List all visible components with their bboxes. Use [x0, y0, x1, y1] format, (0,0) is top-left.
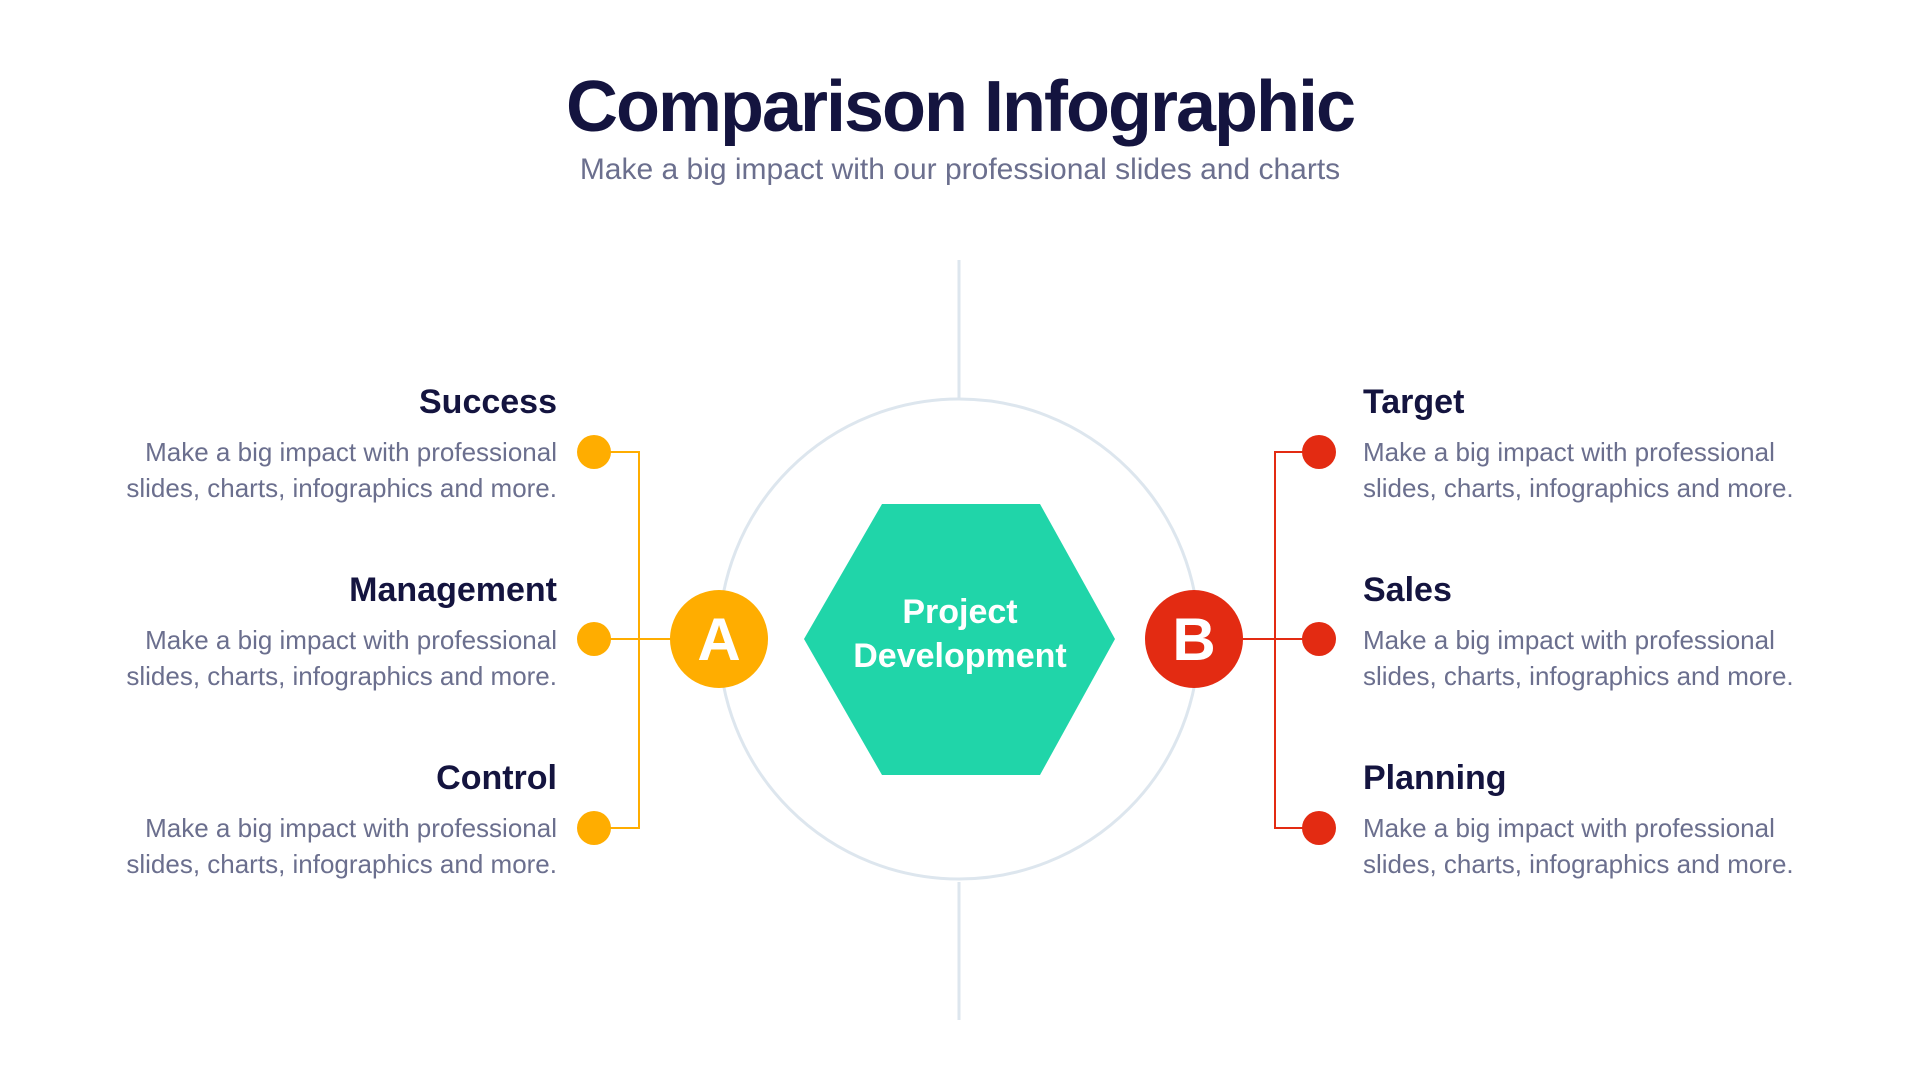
Control: [126, 759, 557, 879]
Control: Make a big impact with professional: [145, 813, 557, 843]
Planning: Planning: [1363, 759, 1507, 797]
Success: Success: [419, 383, 557, 421]
hexagon: Project Development: Development: [853, 637, 1067, 675]
Control: slides, charts, infographics and more.: [126, 849, 557, 879]
badge A: A: [697, 606, 741, 673]
dots right: [1302, 435, 1336, 845]
Success: Make a big impact with professional: [145, 437, 557, 467]
title: Comparison Infographic: [566, 67, 1354, 147]
Target: slides, charts, infographics and more.: [1363, 473, 1794, 503]
badge B: [1145, 590, 1243, 688]
badge B: B: [1172, 606, 1216, 673]
hexagon: Project Development: [804, 504, 1115, 775]
Management: Management: [349, 571, 557, 609]
Management: Make a big impact with professional: [145, 625, 557, 655]
Success: slides, charts, infographics and more.: [126, 473, 557, 503]
Control: Control: [436, 759, 557, 797]
badge A: [670, 590, 768, 688]
Sales: Make a big impact with professional: [1363, 625, 1775, 655]
Sales: [1363, 571, 1794, 691]
Management: slides, charts, infographics and more.: [126, 661, 557, 691]
Success: [126, 383, 557, 503]
Target: [1363, 383, 1794, 503]
Sales: slides, charts, infographics and more.: [1363, 661, 1794, 691]
Sales: Sales: [1363, 571, 1452, 609]
Planning: slides, charts, infographics and more.: [1363, 849, 1794, 879]
hexagon: Project Development: Project: [902, 593, 1018, 631]
dots left: [577, 435, 611, 845]
Management: [126, 571, 557, 691]
Planning: [1363, 759, 1794, 879]
Planning: Make a big impact with professional: [1363, 813, 1775, 843]
Target: Make a big impact with professional: [1363, 437, 1775, 467]
Target: Target: [1363, 383, 1464, 421]
subtitle: Make a big impact with our professional slides and charts: [580, 153, 1340, 186]
